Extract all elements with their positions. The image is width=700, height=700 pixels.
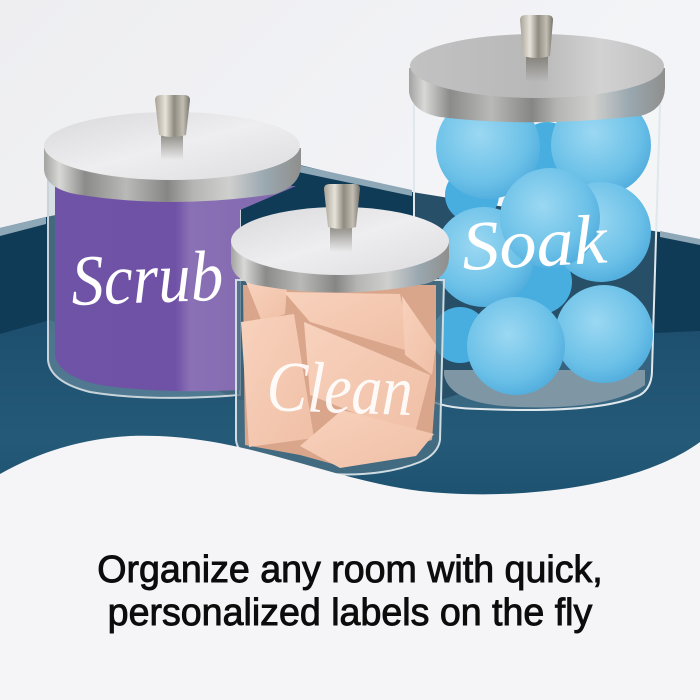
- knob: [155, 95, 190, 160]
- caption: Organize any room with quick,: [97, 548, 603, 590]
- purple salt: [55, 186, 296, 391]
- makeup sponges: [241, 282, 436, 468]
- label: Soak: [460, 201, 611, 286]
- caption: personalized labels on the fly: [108, 591, 592, 633]
- glass body: [414, 105, 660, 410]
- knob: [520, 15, 553, 82]
- bath bombs: [432, 95, 653, 395]
- grey base: [444, 370, 645, 407]
- caption: [97, 548, 603, 634]
- glass body: [236, 280, 444, 474]
- knob: [324, 184, 360, 252]
- white wave panel: [0, 436, 700, 700]
- jar: soak: [409, 15, 665, 410]
- glass body: [48, 180, 240, 398]
- jar: clean: [231, 184, 449, 474]
- lid: [231, 243, 449, 293]
- label: Scrub: [70, 236, 224, 321]
- lid: [409, 68, 665, 122]
- label: Clean: [265, 346, 414, 431]
- lid: [44, 148, 301, 202]
- tray: [0, 165, 700, 520]
- jar: scrub: [44, 95, 301, 398]
